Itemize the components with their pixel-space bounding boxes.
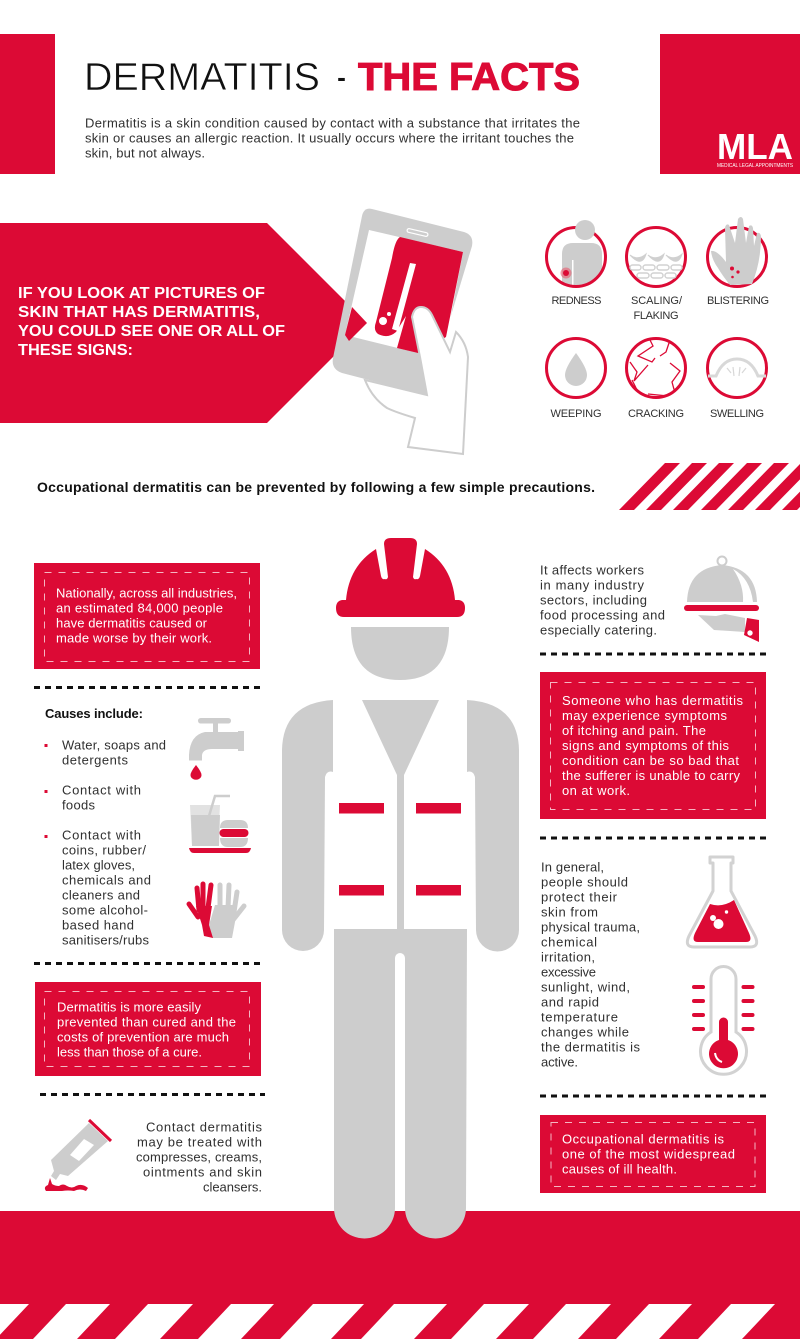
icon: phone held in hand [333,209,472,454]
worker figure [282,538,519,1238]
text: protection advice: physical trauma, [541,920,640,934]
vest pockets [339,803,461,896]
text: protection advice [541,860,640,1070]
label: cracking: CRACKING [628,408,684,420]
causes list: foods [62,798,96,812]
text: protection advice: and rapid [541,994,599,1010]
causes list: detergents [62,752,128,768]
text: treatment: cleansers. [203,1180,262,1194]
causes list: based hand [62,918,134,932]
label: blistering: BLISTERING [707,295,769,307]
text: treatment: may be treated with [137,1134,262,1150]
left arm [282,700,333,951]
header red block right with MLA logo [660,34,800,174]
hazard stripes [619,463,800,510]
panel: ill health: one of the most widespread [562,1146,735,1162]
label: scaling flaking [631,295,683,322]
text: protection advice: irritation, [541,950,595,964]
panel: symptoms: signs and symptoms of this [562,738,730,753]
text: industry sectors: sectors, including [540,592,647,608]
label: swelling: SWELLING [710,408,764,420]
panel: symptoms: may experience symptoms [562,708,728,723]
header red block right with MLA logo: MLA [717,126,793,167]
footer hazard stripes [0,1304,775,1339]
text: industry sectors: It affects workers [540,562,644,578]
causes list: sanitisers/rubs [62,932,150,948]
panel: ill health [540,1115,766,1193]
intro text: skin or causes an allergic reaction. It usually occurs where the irritant touches the [85,130,574,146]
icon: redness [546,220,606,290]
intro text: Dermatitis is a skin condition caused by contact with a substance that irritates the [85,116,580,130]
causes list: Contact with [62,828,141,842]
panel: national statistic: made worse by their work. [56,630,212,646]
panel: symptoms: Someone who has dermatitis [562,693,744,708]
red arrow panel with heading: SKIN THAT HAS DERMATITIS, [18,304,260,321]
causes list: Contact with [62,782,141,798]
text: industry sectors: especially catering. [540,622,657,638]
title [84,56,580,99]
head [351,627,449,680]
title: THE FACTS [358,56,580,99]
panel: prevention [35,982,261,1076]
title: - [337,56,346,99]
panel: symptoms: of itching and pain. The [562,723,706,738]
header red block left [0,34,55,174]
causes list [44,706,166,948]
panel: prevention: Dermatitis is more easily [57,1000,202,1014]
panel: prevention: less than those of a cure. [57,1044,202,1060]
causes list: Causes include: [45,706,143,721]
icon: flask [687,857,757,947]
icon: gloves [189,884,244,938]
text: protection advice: active. [541,1054,578,1070]
red arrow panel with heading: IF YOU LOOK AT PICTURES OF [18,285,265,302]
label: redness: REDNESS [552,295,602,307]
footer red band [0,1211,800,1339]
neck V [362,700,439,929]
panel: national statistic: an estimated 84,000 people [56,600,223,616]
intro text: skin, but not always. [85,146,205,160]
icon: swelling [708,338,766,398]
text: industry sectors [540,562,665,638]
text: protection advice: temperature [541,1010,618,1024]
text: protection advice: chemical [541,934,597,950]
label: weeping: WEEPING [550,408,602,420]
panel: prevention: prevented than cured and the [57,1014,236,1030]
text: protection advice: changes while [541,1024,629,1040]
text: industry sectors: in many industry [540,578,644,592]
hard hat [336,538,465,617]
icon: cracking [626,338,686,398]
panel: national statistic [34,563,260,669]
red arrow panel with heading: THESE SIGNS: [18,342,133,359]
icon: weeping [546,338,606,398]
causes list: Water, soaps and [62,738,166,752]
panel: symptoms: the sufferer is unable to carry [562,768,740,783]
causes list: some alcohol- [62,902,148,918]
red arrow panel with heading [0,223,367,423]
intro text [85,116,580,160]
text: protection advice: In general, [541,860,604,874]
text: protection advice: sunlight, wind, [541,980,630,994]
text: protection advice: skin from [541,904,598,920]
text: protection advice: excessive [541,964,596,980]
text: treatment: Contact dermatitis [146,1120,262,1134]
right arm [467,700,519,952]
title: DERMATITIS [84,56,320,99]
icon: tap [189,718,244,780]
text: treatment: ointments and skin [143,1164,262,1180]
text: treatment [136,1120,262,1194]
causes list: chemicals and [62,872,151,888]
causes list: cleaners and [62,888,140,902]
icon: food and drink [189,796,251,853]
causes list: coins, rubber/ [62,842,146,858]
panel: ill health: Occupational dermatitis is [562,1132,724,1146]
text: treatment: compresses, creams, [136,1150,262,1164]
label: scaling flaking: SCALING/ [631,295,683,307]
panel: national statistic: have dermatitis caused or [56,616,208,630]
icon: blistering [708,217,766,286]
panel: symptoms [540,672,766,819]
panel: ill health: causes of ill health. [562,1162,677,1176]
text: protection advice: protect their [541,890,618,904]
red arrow panel with heading: YOU COULD SEE ONE OR ALL OF [18,323,285,340]
panel: symptoms: condition can be so bad that [562,753,739,768]
text: protection advice: the dermatitis is [541,1040,640,1054]
icon: scaling flaking [626,228,686,286]
text: protection advice: people should [541,874,628,890]
subheading: precautions: Occupational dermatitis can be prevented by following a few simple precautions. [37,479,595,495]
legs [334,929,467,1238]
panel: symptoms: on at work. [562,783,630,798]
panel: national statistic: Nationally, across all industries, [56,586,237,600]
panel: prevention: costs of prevention are much [57,1030,229,1044]
icon: cream tube [45,1120,111,1191]
text: industry sectors: food processing and [540,608,665,622]
icon: thermometer [692,966,754,1074]
label: scaling flaking: FLAKING [634,310,678,322]
icon: serving cloche [684,556,759,642]
causes list: latex gloves, [62,858,135,872]
